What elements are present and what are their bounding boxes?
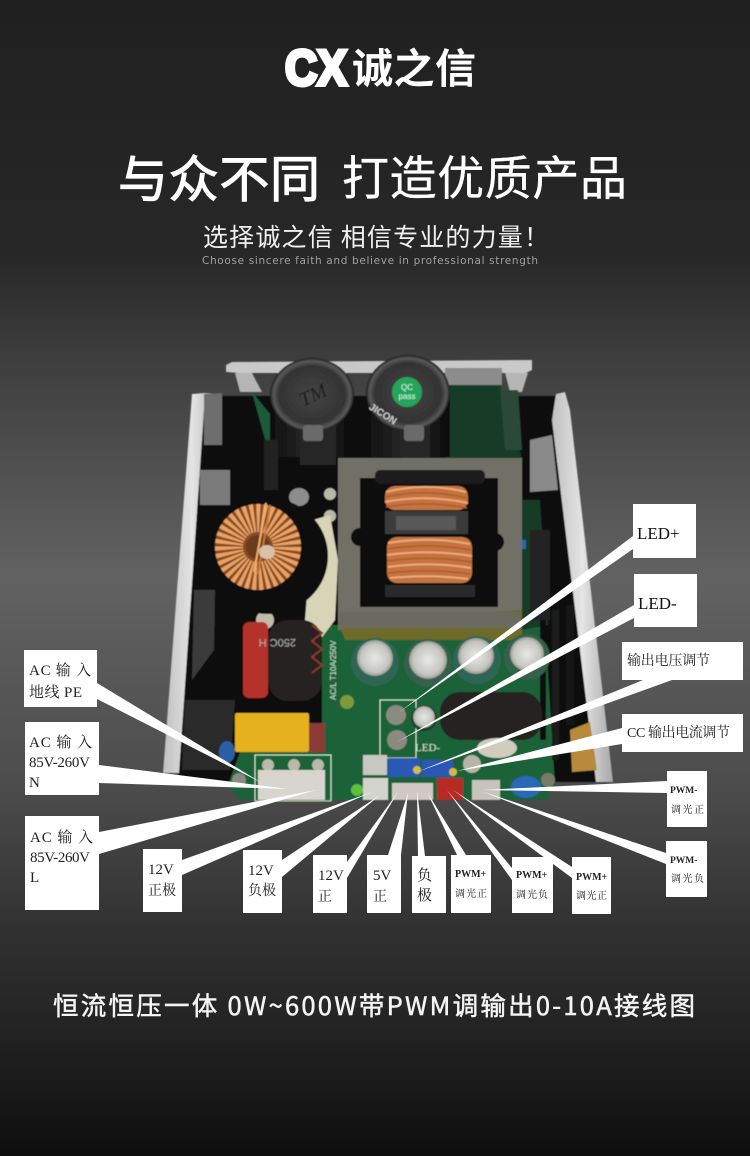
label: PWM- dimming positive: 调光正 (671, 803, 704, 816)
blue capacitor left (219, 741, 235, 763)
title: 与众不同 (118, 140, 320, 212)
label: AC input L: 85V-260V (30, 850, 90, 866)
label: AC input earth: AC 输 入 (29, 662, 91, 679)
chassis (163, 360, 613, 782)
label: 12V positive: 正 (318, 889, 332, 905)
label: LED positive: LED+ (637, 524, 680, 543)
toroid inductor (208, 498, 328, 614)
label: PWM+ dimming negative: 调光负 (516, 888, 548, 901)
label: negative pole (412, 790, 446, 913)
circuit board (228, 625, 555, 800)
capacitor right: JICON (367, 402, 398, 427)
red connector (437, 778, 463, 800)
caption: 恒流恒压一体 0W~600W带PWM调输出0-10A接线图 (53, 986, 695, 1023)
label: LED negative: LED- (638, 594, 677, 613)
small parts left of transformer (256, 440, 338, 640)
label: 5V positive: 正 (373, 889, 387, 905)
logo: CX (285, 40, 347, 96)
silkscreen and led pads: AC/L T10A/250V (329, 640, 338, 700)
silkscreen and led pads (329, 640, 440, 758)
label: AC input N: 85V-260V (29, 755, 90, 771)
label: PWM+ dimming positive second: 调光正 (576, 889, 607, 902)
label: AC input N: N (29, 775, 40, 791)
label: PWM- dimming negative: PWM- (670, 856, 697, 866)
title (118, 140, 627, 212)
label: 12V negative pole (243, 795, 380, 913)
qc sticker: pass (399, 392, 415, 401)
label: 12V positive (313, 792, 398, 913)
label: 12V positive: 12V (318, 868, 344, 884)
label: AC input earth: 地线 PE (29, 683, 82, 701)
english subtitle: Choose sincere faith and believe in professional strength (202, 255, 538, 267)
label: 12V negative pole: 12V (248, 863, 274, 879)
red capacitor (243, 622, 268, 698)
title: 打造优质产品 (342, 140, 627, 209)
label: PWM+ dimming positive: 调光正 (455, 887, 487, 900)
logo (285, 35, 476, 96)
blue capacitor right (511, 773, 555, 798)
label: PWM+ dimming positive second (453, 790, 611, 914)
black output inductor (440, 692, 542, 758)
label: 12V negative pole: 负极 (248, 882, 276, 899)
label: 12V positive pole: 12V (148, 862, 174, 878)
label: PWM+ dimming negative (447, 790, 553, 913)
label: negative pole: 负 (417, 866, 432, 884)
power supply board photo (163, 355, 613, 801)
lower winding (387, 537, 472, 583)
label: PWM+ dimming negative: PWM+ (516, 870, 548, 881)
output capacitors (351, 634, 550, 687)
label: PWM- dimming negative: 调光负 (671, 872, 704, 885)
label: output voltage adjustment: 输出电压调节 (627, 652, 710, 669)
label: 5V positive: 5V (373, 868, 392, 884)
label: CC output current adjustment: CC 输出电流调节 (627, 724, 730, 741)
label: AC input earth (24, 650, 262, 783)
right side components (520, 530, 597, 772)
label: AC input N: AC 输 入 (29, 734, 92, 751)
transformer (338, 458, 522, 640)
red-brown capacitor (309, 723, 325, 752)
qc sticker: QC (401, 383, 413, 392)
label: PWM- dimming negative (481, 791, 707, 897)
label: output voltage adjustment (417, 642, 743, 772)
label: AC input L: L (30, 870, 39, 886)
silkscreen and led pads: LED- (415, 742, 440, 754)
logo: 诚之信 (352, 35, 476, 95)
upper winding (385, 486, 468, 510)
label: PWM- dimming positive: PWM- (670, 786, 697, 796)
black inductor (259, 620, 322, 701)
white connectors (351, 755, 500, 800)
label: LED positive (398, 504, 696, 713)
label: PWM+ dimming positive second: PWM+ (576, 872, 608, 883)
blue potentiometers (388, 755, 481, 777)
subtitle: 选择诚之信 相信专业的力量！ (203, 218, 549, 254)
capacitor left: TM (296, 379, 332, 411)
label: AC input N (25, 722, 288, 795)
label: AC input L (25, 790, 316, 910)
qc sticker (392, 377, 422, 407)
label: 5V positive (367, 793, 408, 913)
label: PWM+ dimming positive: PWM+ (455, 869, 487, 880)
yellow safety capacitor (235, 713, 309, 752)
black inductor: 250C H (259, 636, 296, 648)
input terminal block (232, 755, 331, 801)
label: PWM+ dimming positive (427, 792, 491, 913)
label: AC input L: AC 输 入 (30, 829, 93, 846)
label: CC output current adjustment (457, 714, 743, 771)
capacitor right (366, 355, 450, 463)
label: 12V positive pole: 正极 (148, 882, 176, 899)
label: 12V positive pole (143, 792, 372, 912)
label: LED negative (397, 574, 697, 742)
label: negative pole: 极 (417, 886, 432, 904)
capacitor left (270, 358, 354, 465)
label: PWM- dimming positive (482, 771, 707, 827)
